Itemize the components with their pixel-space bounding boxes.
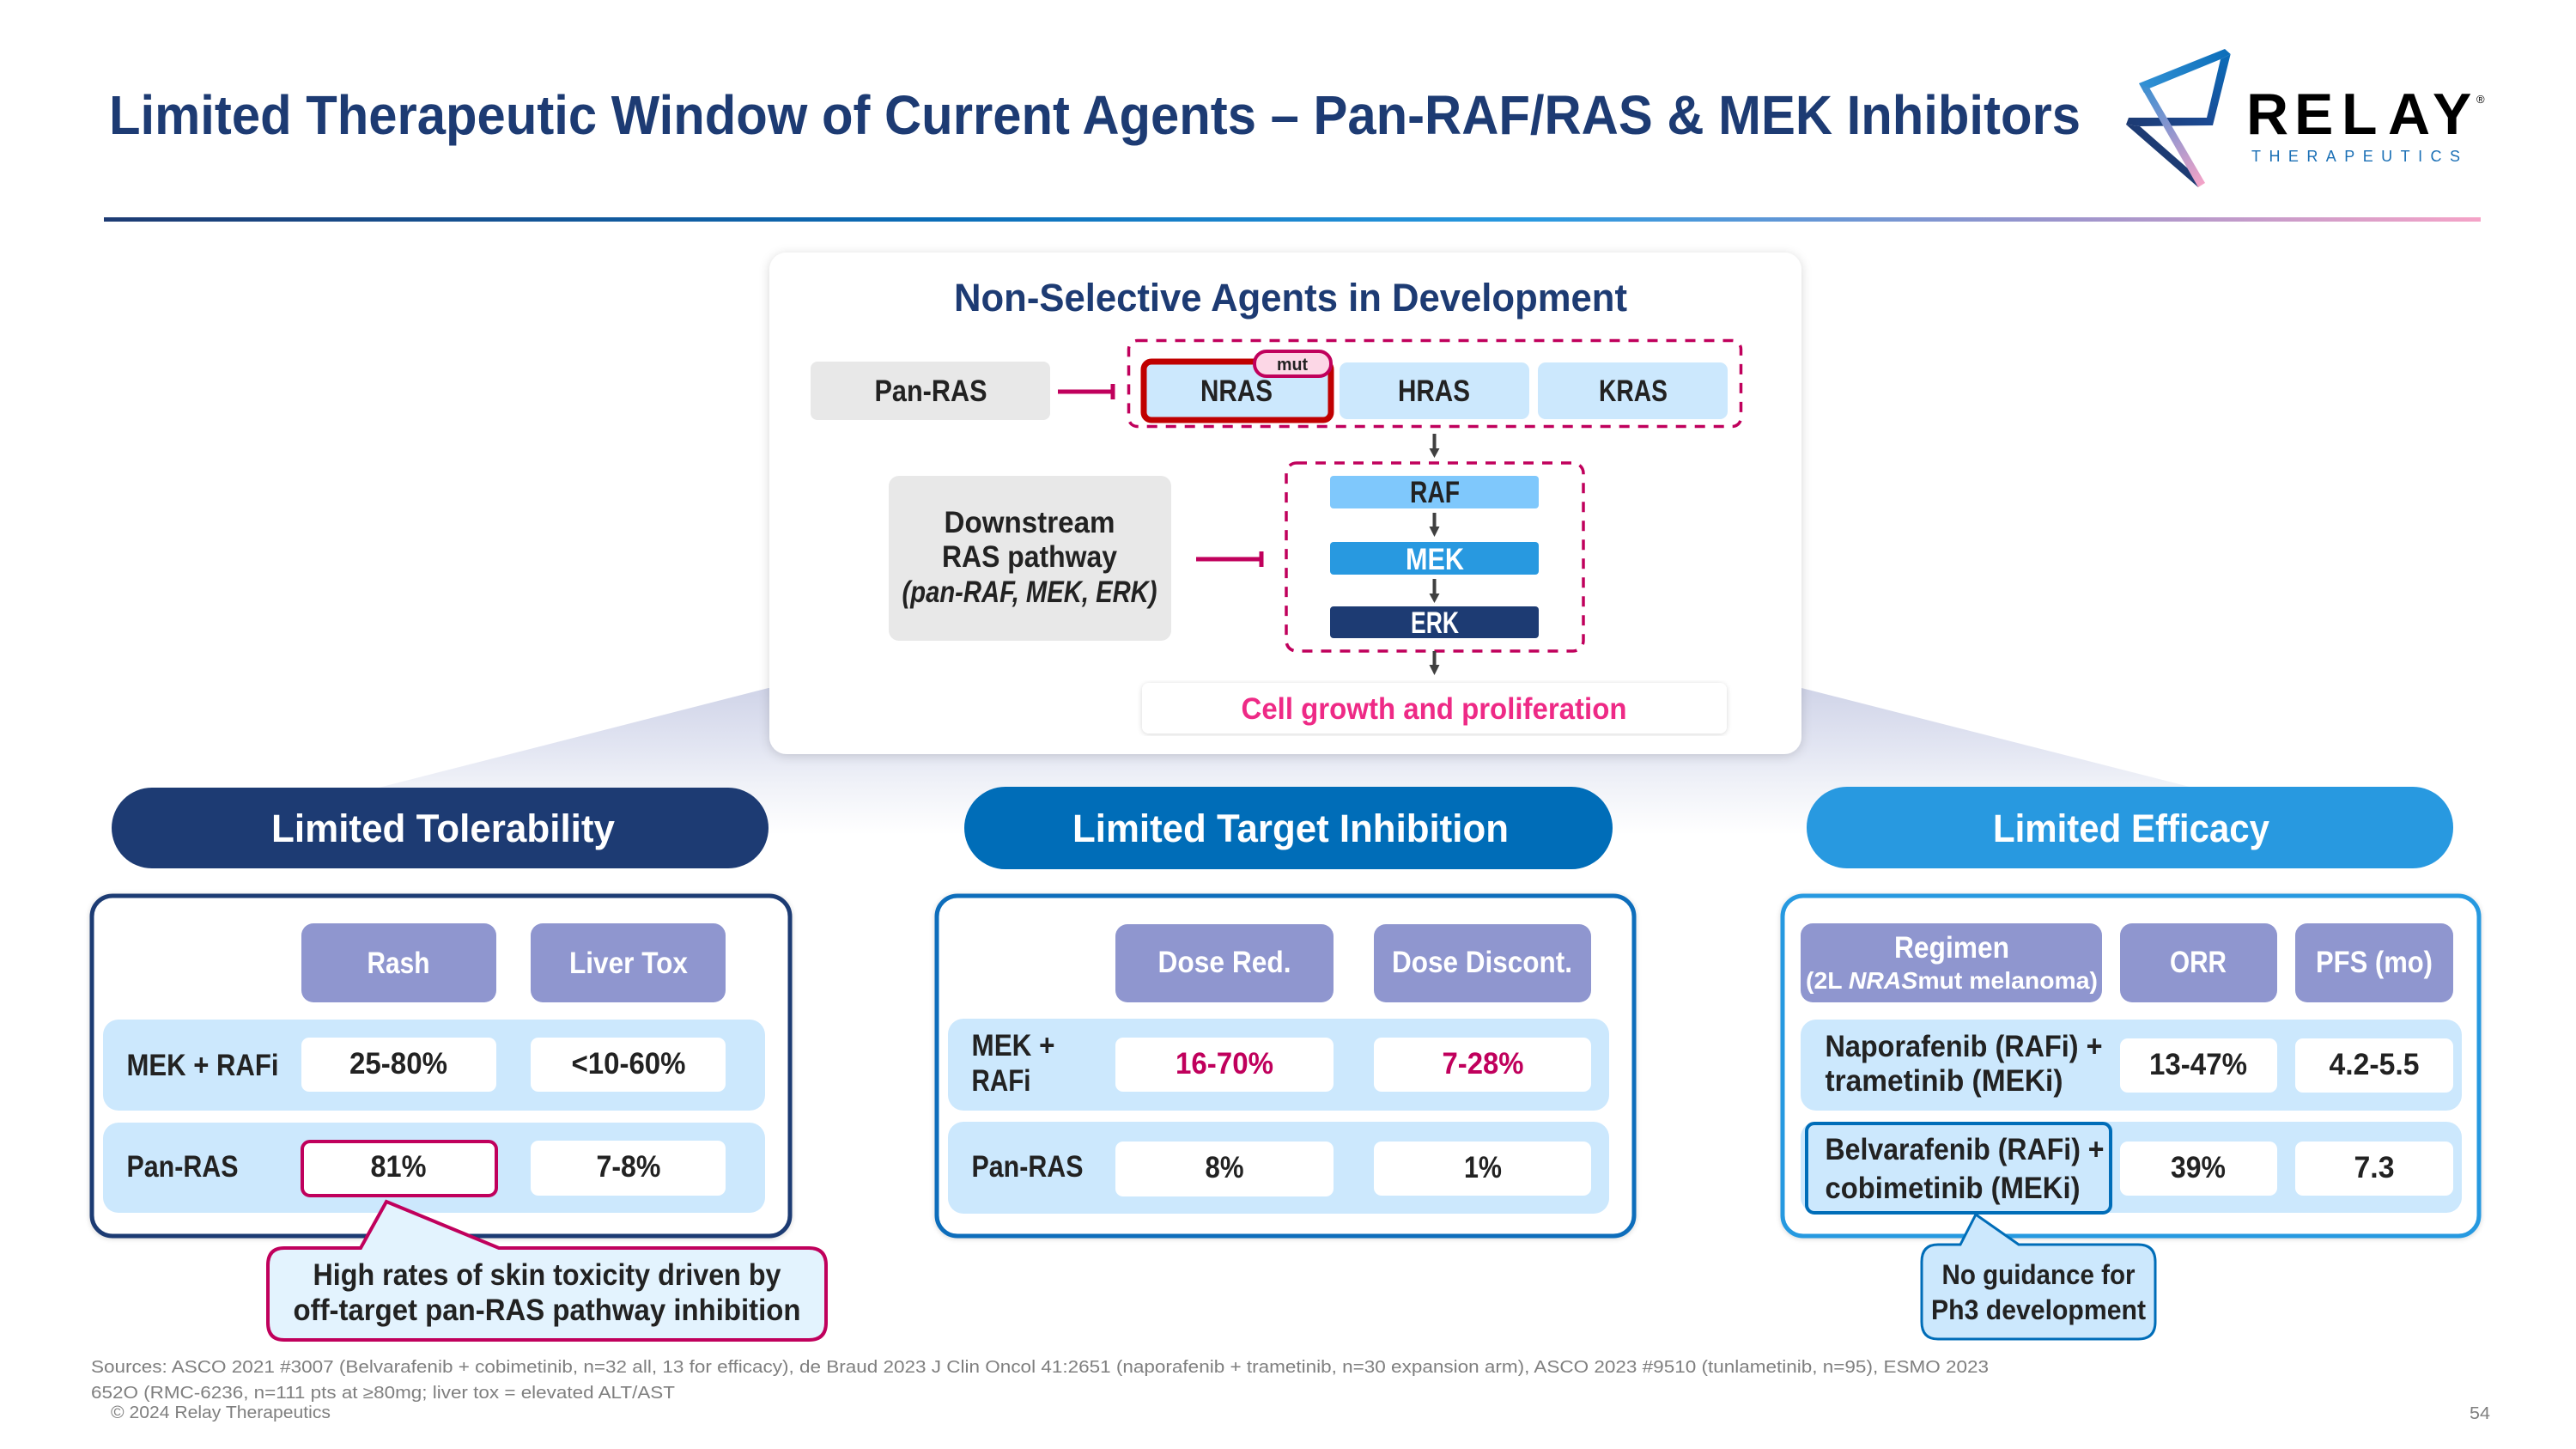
row: MEK + RAFi: <10-60%	[572, 1047, 685, 1081]
row: belvarafenib: 39%	[2171, 1151, 2226, 1184]
row: MEK + RAFi	[948, 1019, 1609, 1111]
arrow: ERK to outcome	[1429, 651, 1439, 675]
Downstream box: (pan-RAF, MEK, ERK)	[902, 575, 1157, 609]
footnote: sources	[91, 1358, 1989, 1403]
heading: Limited Tolerability	[112, 788, 769, 868]
heading: Limited Target Inhibition: Limited Target Inhibition	[1072, 807, 1509, 850]
footnote: sources: Sources: ASCO 2021 #3007 (Belvarafenib + cobimetinib, n=32 all, 13 for efficacy), de Braud 2023 J Clin Oncol 41:2651 (naporafenib + trametinib, n=30 expansion arm), ASCO 2023 #9510 (tunlametinib, n=95), ESMO 2023	[91, 1358, 1989, 1377]
callout: skin toxicity	[268, 1202, 826, 1340]
card heading: Non-Selective Agents in Development	[954, 276, 1627, 320]
row: Pan-RAS: 8%	[1206, 1151, 1243, 1184]
logo: Relay Therapeutics: ®	[2476, 93, 2485, 106]
heading: Limited Target Inhibition	[964, 787, 1613, 869]
Pan-RAS box	[811, 362, 1050, 420]
arrow: RAS to RAF	[1429, 434, 1439, 458]
title: Limited Therapeutic Window of Current Agents – Pan-RAF/RAS & MEK Inhibitors	[109, 84, 2081, 146]
header: Rash	[301, 923, 496, 1002]
callout: skin toxicity: High rates of skin toxicity driven by	[313, 1258, 781, 1292]
row: belvarafenib: Belvarafenib (RAFi) +	[1826, 1133, 2104, 1166]
row: MEK + RAFi: 7-28%	[1443, 1047, 1523, 1081]
mut pill: mut	[1277, 356, 1308, 374]
header: Dose Red.	[1115, 924, 1334, 1002]
logo: Relay Therapeutics: THERAPEUTICS	[2251, 148, 2460, 165]
row: naporafenib: 4.2-5.5	[2329, 1048, 2420, 1081]
header: Regimen: Regimen	[1894, 931, 2009, 965]
header: PFS	[2295, 923, 2453, 1002]
copyright: © 2024 Relay Therapeutics	[111, 1403, 331, 1422]
row: Pan-RAS	[103, 1123, 765, 1213]
callout: no guidance	[1922, 1215, 2155, 1339]
row: Pan-RAS: 1%	[1464, 1151, 1502, 1184]
page number: 54	[2470, 1404, 2490, 1423]
header: Regimen	[1801, 923, 2102, 1002]
heading: Limited Efficacy: Limited Efficacy	[1993, 807, 2269, 850]
logo: Relay Therapeutics: RELAY	[2246, 82, 2471, 147]
header: Liver Tox: Liver Tox	[569, 947, 688, 980]
Pan-RAS box: Pan-RAS	[874, 374, 987, 408]
header: Dose Red.: Dose Red.	[1157, 946, 1291, 979]
header: ORR: ORR	[2170, 946, 2227, 979]
heading: Limited Efficacy	[1807, 787, 2453, 868]
inhibition marker: downstream	[1196, 551, 1261, 567]
Downstream box	[889, 476, 1171, 641]
panel: efficacy table	[1783, 896, 2479, 1236]
dashed group: RAF MEK ERK	[1286, 463, 1583, 651]
outcome box: Cell growth and proliferation	[1242, 692, 1626, 726]
row: naporafenib: 13-47%	[2149, 1048, 2247, 1081]
panel: tolerability table	[92, 896, 790, 1236]
callout: no guidance: Ph3 development	[1931, 1294, 2146, 1325]
Downstream box: Downstream	[945, 506, 1115, 539]
row: Pan-RAS: Pan-RAS	[972, 1150, 1084, 1184]
row: belvarafenib: cobimetinib (MEKi)	[1826, 1172, 2080, 1205]
RAF: RAF	[1410, 476, 1460, 509]
header: Dose Discont.: Dose Discont.	[1392, 946, 1572, 979]
ERK: ERK	[1411, 606, 1459, 640]
MEK: MEK	[1406, 543, 1464, 576]
footnote: sources: 652O (RMC-6236, n=111 pts at ≥80mg; liver tox = elevated ALT/AST	[91, 1384, 675, 1403]
KRAS	[1538, 362, 1728, 419]
row: MEK + RAFi: 25-80%	[349, 1047, 447, 1081]
row: Pan-RAS: Pan-RAS	[127, 1150, 239, 1184]
row: MEK + RAFi: 16-70%	[1176, 1047, 1273, 1081]
NRAS: NRAS	[1200, 374, 1273, 408]
panel: target inhibition table	[937, 896, 1634, 1236]
row: naporafenib: trametinib (MEKi)	[1826, 1064, 2063, 1098]
HRAS: HRAS	[1398, 374, 1470, 408]
row: naporafenib: Naporafenib (RAFi) +	[1826, 1030, 2102, 1063]
NRAS	[1144, 362, 1331, 420]
KRAS: KRAS	[1599, 374, 1668, 408]
heading: Limited Tolerability: Limited Tolerability	[271, 807, 615, 850]
row: Pan-RAS	[948, 1122, 1609, 1214]
header: Liver Tox	[531, 923, 726, 1002]
row: MEK + RAFi	[103, 1020, 765, 1111]
row: belvarafenib	[1801, 1122, 2462, 1213]
header: Regimen: (2L NRASmut melanoma)	[1806, 967, 2098, 994]
header: Rash: Rash	[368, 947, 429, 980]
dashed group: RAS isoforms	[1128, 340, 1741, 426]
header: ORR	[2120, 923, 2277, 1002]
ERK	[1330, 606, 1539, 640]
row: Pan-RAS: 7-8%	[596, 1150, 661, 1184]
row: MEK + RAFi: MEK +	[972, 1029, 1054, 1062]
header: PFS: PFS (mo)	[2316, 946, 2433, 979]
row: MEK + RAFi: MEK + RAFi	[127, 1049, 278, 1082]
row: Pan-RAS: 81%	[371, 1150, 426, 1184]
arrow: RAF to MEK	[1429, 513, 1439, 537]
arrow: MEK to ERK	[1429, 579, 1439, 603]
row: MEK + RAFi: RAFi	[972, 1064, 1030, 1098]
panel: non-selective agents	[769, 253, 1801, 754]
RAF	[1330, 476, 1539, 509]
mut pill	[1255, 351, 1331, 376]
header: Dose Discont.	[1374, 924, 1591, 1002]
outcome box	[1142, 683, 1727, 734]
row: naporafenib	[1801, 1020, 2462, 1111]
inhibition marker: Pan-RAS	[1058, 384, 1113, 399]
HRAS	[1340, 362, 1529, 419]
logo: Relay Therapeutics	[2126, 49, 2485, 187]
MEK	[1330, 542, 1539, 576]
callout: no guidance: No guidance for	[1942, 1259, 2135, 1290]
Downstream box: RAS pathway	[942, 540, 1117, 574]
row: belvarafenib: 7.3	[2354, 1151, 2394, 1184]
callout: skin toxicity: off-target pan-RAS pathway inhibition	[294, 1294, 800, 1327]
